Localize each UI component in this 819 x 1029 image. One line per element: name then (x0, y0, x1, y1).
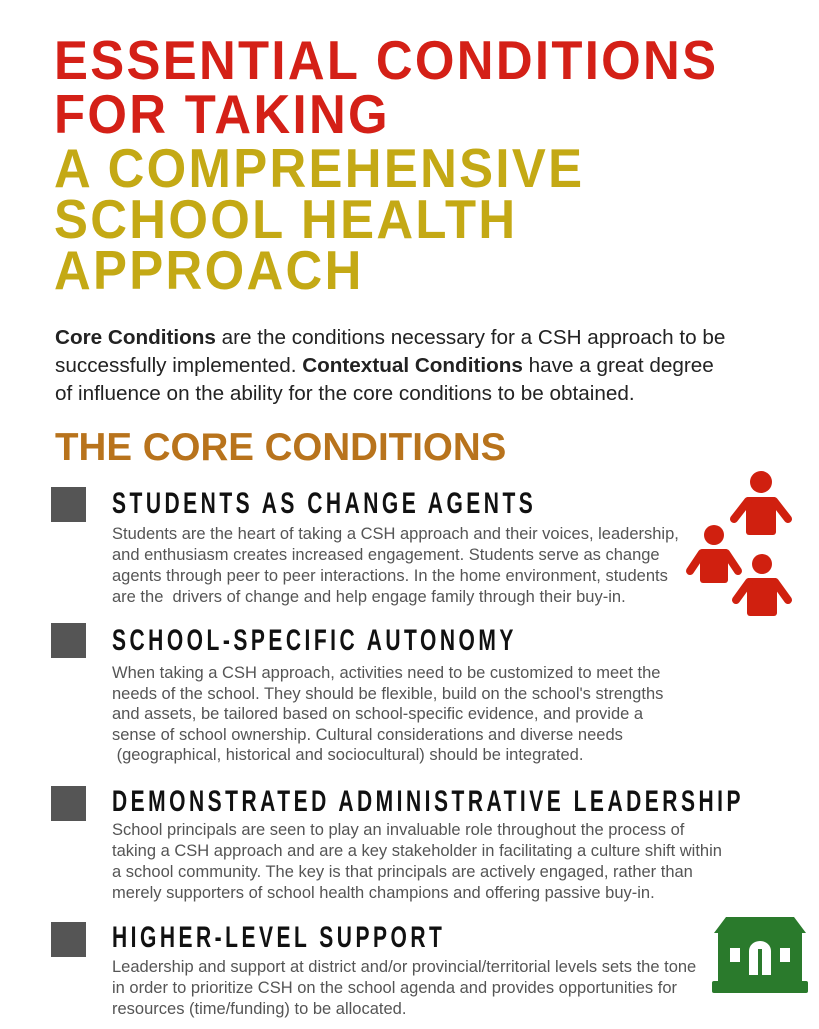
text: SCHOOL-SPECIFIC AUTONOMY (112, 624, 517, 657)
intro text: of influence on the ability for the core conditions to be obtained. (55, 382, 635, 405)
item 3 (51, 785, 744, 902)
text: (geographical, historical and sociocultural) should be integrated. (117, 746, 583, 764)
text: ESSENTIAL CONDITIONS (54, 29, 718, 91)
text: APPROACH (54, 239, 364, 301)
title (54, 29, 718, 301)
icon: people (686, 471, 792, 616)
text: Leadership and support at district and/or provincial/territorial levels sets the tone (112, 958, 696, 976)
item 4 (51, 921, 696, 1018)
text: FOR TAKING (54, 83, 390, 145)
text: merely supporters of school health champions and offering passive buy-in. (112, 884, 655, 902)
text: agents through peer to peer interactions. In the home environment, students (112, 567, 668, 585)
text: and assets, be tailored based on school-specific evidence, and provide a (112, 705, 643, 723)
text: When taking a CSH approach, activities need to be customized to meet the (112, 664, 660, 682)
intro text: Core Conditions are the conditions necessary for a CSH approach to be (55, 326, 725, 349)
item 2 (51, 623, 663, 764)
section heading: THE CORE CONDITIONS (55, 426, 506, 469)
intro text (55, 326, 725, 405)
text: in order to prioritize CSH on the school agenda and provides opportunities for (112, 979, 677, 997)
text: A COMPREHENSIVE (54, 137, 584, 199)
text: Students are the heart of taking a CSH approach and their voices, leadership, (112, 525, 679, 543)
intro text: successfully implemented. Contextual Conditions have a great degree (55, 354, 714, 377)
text: taking a CSH approach and are a key stakeholder in facilitating a culture shift within (112, 842, 722, 860)
text: resources (time/funding) to be allocated. (112, 1000, 406, 1018)
text: SCHOOL HEALTH (54, 188, 517, 250)
text: DEMONSTRATED ADMINISTRATIVE LEADERSHIP (112, 785, 744, 818)
text: a school community. The key is that principals are actively engaged, rather than (112, 863, 693, 881)
text: needs of the school. They should be flexible, build on the school's strengths (112, 685, 663, 703)
item 1 (51, 487, 679, 606)
text: sense of school ownership. Cultural considerations and diverse needs (112, 726, 623, 744)
text: and enthusiasm creates increased engagement. Students serve as change (112, 546, 660, 564)
text: STUDENTS AS CHANGE AGENTS (112, 487, 536, 520)
text: are the drivers of change and help engage family through their buy-in. (112, 588, 626, 606)
text: School principals are seen to play an invaluable role throughout the process of (112, 821, 684, 839)
text: HIGHER-LEVEL SUPPORT (112, 921, 445, 954)
icon: school (712, 917, 808, 993)
